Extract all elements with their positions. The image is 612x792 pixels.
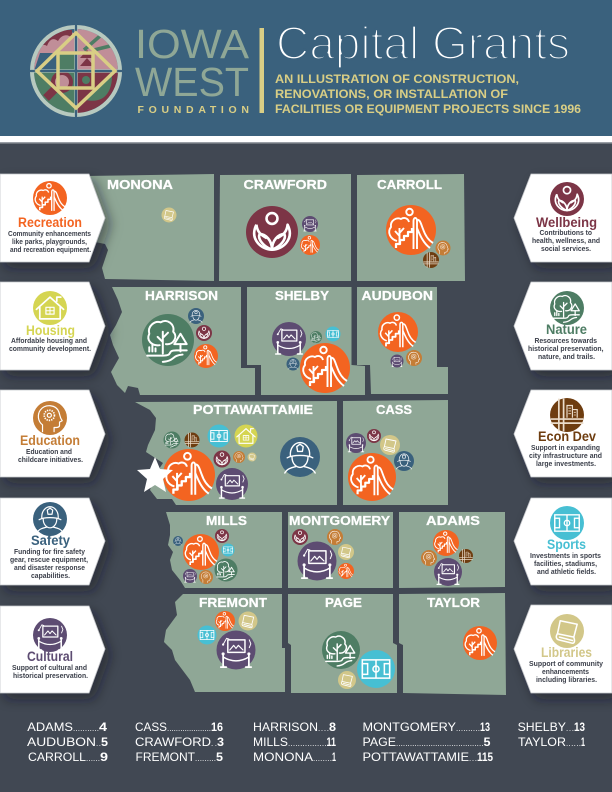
county: Fremont <box>164 594 285 692</box>
legend card: Econ Dev <box>514 390 612 477</box>
county totals list: 16 <box>211 721 224 734</box>
legend card: Sports: and athletic fields. <box>537 567 596 576</box>
header divider <box>260 28 264 113</box>
county totals list: 5 <box>216 751 224 764</box>
county totals list: ......... <box>195 754 216 763</box>
legend card: Safety <box>0 498 105 585</box>
subtitle: RENOVATIONS, OR INSTALLATION OF <box>275 87 508 101</box>
legend card: Safety: capabilities. <box>31 571 70 580</box>
county: Montgomery <box>288 512 393 588</box>
county: Crawford <box>219 174 351 281</box>
legend card: Econ Dev: Econ Dev <box>538 429 596 444</box>
county totals list: HARRISON <box>253 721 318 734</box>
county: Audubon: AUDUBON <box>362 288 433 303</box>
legend card: Safety: and disaster response <box>14 563 86 572</box>
county totals list: ................ <box>288 739 326 748</box>
logo wordmark: FOUNDATION <box>138 104 249 116</box>
county totals list: 13 <box>480 721 490 734</box>
county: Shelby <box>247 287 365 395</box>
county totals list: CASS <box>135 721 167 734</box>
legend card: Safety: gear, rescue equipment, <box>10 555 88 564</box>
county totals list: 9 <box>100 751 109 764</box>
county totals list: ........ <box>313 754 332 763</box>
county totals list: CARROLL <box>28 751 87 764</box>
legend card: Education: childcare initiatives. <box>18 455 83 464</box>
header band <box>0 0 612 144</box>
county totals list: 4 <box>99 721 108 734</box>
legend card: Recreation <box>0 174 105 262</box>
county: Pottawattamie <box>135 401 337 505</box>
county: Harrison <box>110 287 255 395</box>
legend card: Education <box>0 390 105 477</box>
county totals list: ........... <box>73 724 99 733</box>
county totals list: 13 <box>574 721 585 734</box>
logo wordmark: WEST <box>135 59 249 105</box>
county totals list: ...... <box>86 754 100 763</box>
legend card: Libraries: enhancements <box>542 667 589 676</box>
county: Mills <box>166 512 282 588</box>
county totals list: .... <box>318 724 329 733</box>
legend card: Nature: Resources towards <box>534 336 597 345</box>
county: Monona <box>85 174 214 281</box>
legend card: Cultural: Support of cultural and <box>12 663 87 672</box>
county totals list: .......... <box>456 724 480 733</box>
legend card: Libraries <box>514 605 612 693</box>
county totals list: ...................................... <box>396 739 484 748</box>
county: Page <box>288 594 397 693</box>
county totals list: .. <box>211 739 217 748</box>
legend card: Cultural: Cultural <box>27 649 73 664</box>
legend card: Recreation: Community enhancements <box>8 229 91 238</box>
title: Capital Grants <box>276 17 570 69</box>
county totals list: ... <box>566 724 574 733</box>
county: Audubon <box>357 287 448 394</box>
legend card: Sports: Investments in sports <box>530 551 601 560</box>
county: Adams <box>399 512 505 588</box>
legend card: Nature <box>514 282 612 370</box>
county: Monona: MONONA <box>107 177 174 192</box>
county: Montgomery: MONTGOMERY <box>289 513 390 528</box>
legend card: Nature: Nature <box>546 322 587 337</box>
subtitle: AN ILLUSTRATION OF CONSTRUCTION, <box>275 72 519 86</box>
logo wordmark: IOWA <box>135 21 250 67</box>
county: Adams: ADAMS <box>426 513 480 528</box>
legend card: Econ Dev: Support in expanding <box>531 443 600 452</box>
legend card: Housing: Affordable housing and <box>11 336 87 345</box>
legend card: Recreation: Recreation <box>18 215 82 230</box>
subtitle: FACILITIES OR EQUIPMENT PROJECTS SINCE 1996 <box>275 102 581 116</box>
county totals list: 1 <box>332 751 336 764</box>
county totals list: 5 <box>101 736 109 749</box>
legend card: Wellbeing: Contributions to <box>540 228 592 237</box>
county totals list: .. <box>96 739 101 748</box>
county totals list: 5 <box>484 736 491 749</box>
county: Page: PAGE <box>325 595 362 610</box>
star: Council Bluffs marker <box>137 457 173 492</box>
county: Taylor: TAYLOR <box>427 595 481 610</box>
county totals list <box>27 721 585 764</box>
legend card: Housing: community development. <box>9 344 91 353</box>
legend card: Wellbeing: health, wellness, and <box>532 236 600 245</box>
legend card: Wellbeing: Wellbeing <box>536 215 597 230</box>
county totals list: MONTGOMERY <box>362 721 456 734</box>
legend card: Safety: Funding for fire safety <box>14 547 86 556</box>
county totals list: SHELBY <box>518 721 566 734</box>
county: Cass <box>343 400 448 505</box>
county totals list: AUDUBON <box>27 736 96 749</box>
legend card: Wellbeing: social services. <box>541 244 591 253</box>
county totals list: POTTAWATTAMIE <box>362 751 469 764</box>
county: Cass: CASS <box>376 402 412 417</box>
subtitle <box>275 72 581 116</box>
legend card: Education: Education <box>20 433 80 448</box>
county totals list: PAGE <box>362 736 396 749</box>
county: Mills: MILLS <box>206 513 247 528</box>
legend card: Nature: nature, and trails. <box>538 352 595 361</box>
county totals list: 3 <box>217 736 225 749</box>
county totals list: 115 <box>477 751 493 764</box>
county: Pottawattamie: POTTAWATTAMIE <box>193 402 313 417</box>
legend card: Recreation: and recreation equipment. <box>10 245 91 254</box>
legend card: Libraries: Libraries <box>541 645 592 660</box>
county totals list: ADAMS <box>27 721 73 734</box>
legend card: Cultural <box>0 606 105 693</box>
legend card: Libraries: including libraries. <box>536 675 597 684</box>
county totals list: 1 <box>581 736 585 749</box>
legend card: Recreation: like parks, playgrounds, <box>12 237 87 246</box>
legend card: Sports: facilities, stadiums, <box>534 559 597 568</box>
county: Fremont: FREMONT <box>199 595 267 610</box>
legend card: Education: Education and <box>26 447 72 456</box>
legend card: Cultural: historical preservation. <box>13 671 88 680</box>
legend card: Wellbeing <box>514 174 612 262</box>
county: Carroll: CARROLL <box>377 177 442 192</box>
county: Shelby: SHELBY <box>275 288 329 303</box>
legend card: Libraries: Support of community <box>529 659 604 668</box>
county totals list: 8 <box>329 721 337 734</box>
legend card: Safety: Safety <box>31 533 70 548</box>
legend card: Sports: Sports <box>547 537 586 552</box>
county totals list: MONONA <box>253 751 313 764</box>
county: Harrison: HARRISON <box>145 288 218 303</box>
county totals list: ... <box>469 754 477 763</box>
county totals list: TAYLOR <box>518 736 566 749</box>
logo wordmark <box>135 21 250 116</box>
county: Crawford: CRAWFORD <box>244 177 327 192</box>
logo emblem <box>28 23 124 119</box>
county totals list: 11 <box>326 736 336 749</box>
legend card: Nature: historical preservation, <box>528 344 604 353</box>
legend card: Econ Dev: large investments. <box>536 459 596 468</box>
legend card: Econ Dev: city infrastructure and <box>529 451 602 460</box>
county totals list: MILLS <box>253 736 288 749</box>
legend card: Sports <box>514 498 612 585</box>
legend card: Housing <box>0 282 105 370</box>
legend card: Housing: Housing <box>26 323 75 338</box>
county totals list: .................... <box>167 724 211 733</box>
county totals list: ...... <box>566 739 581 748</box>
county: Carroll <box>357 174 465 281</box>
county totals list: CRAWFORD <box>135 736 211 749</box>
county totals list: FREMONT <box>136 751 195 764</box>
county: Taylor <box>399 593 506 695</box>
